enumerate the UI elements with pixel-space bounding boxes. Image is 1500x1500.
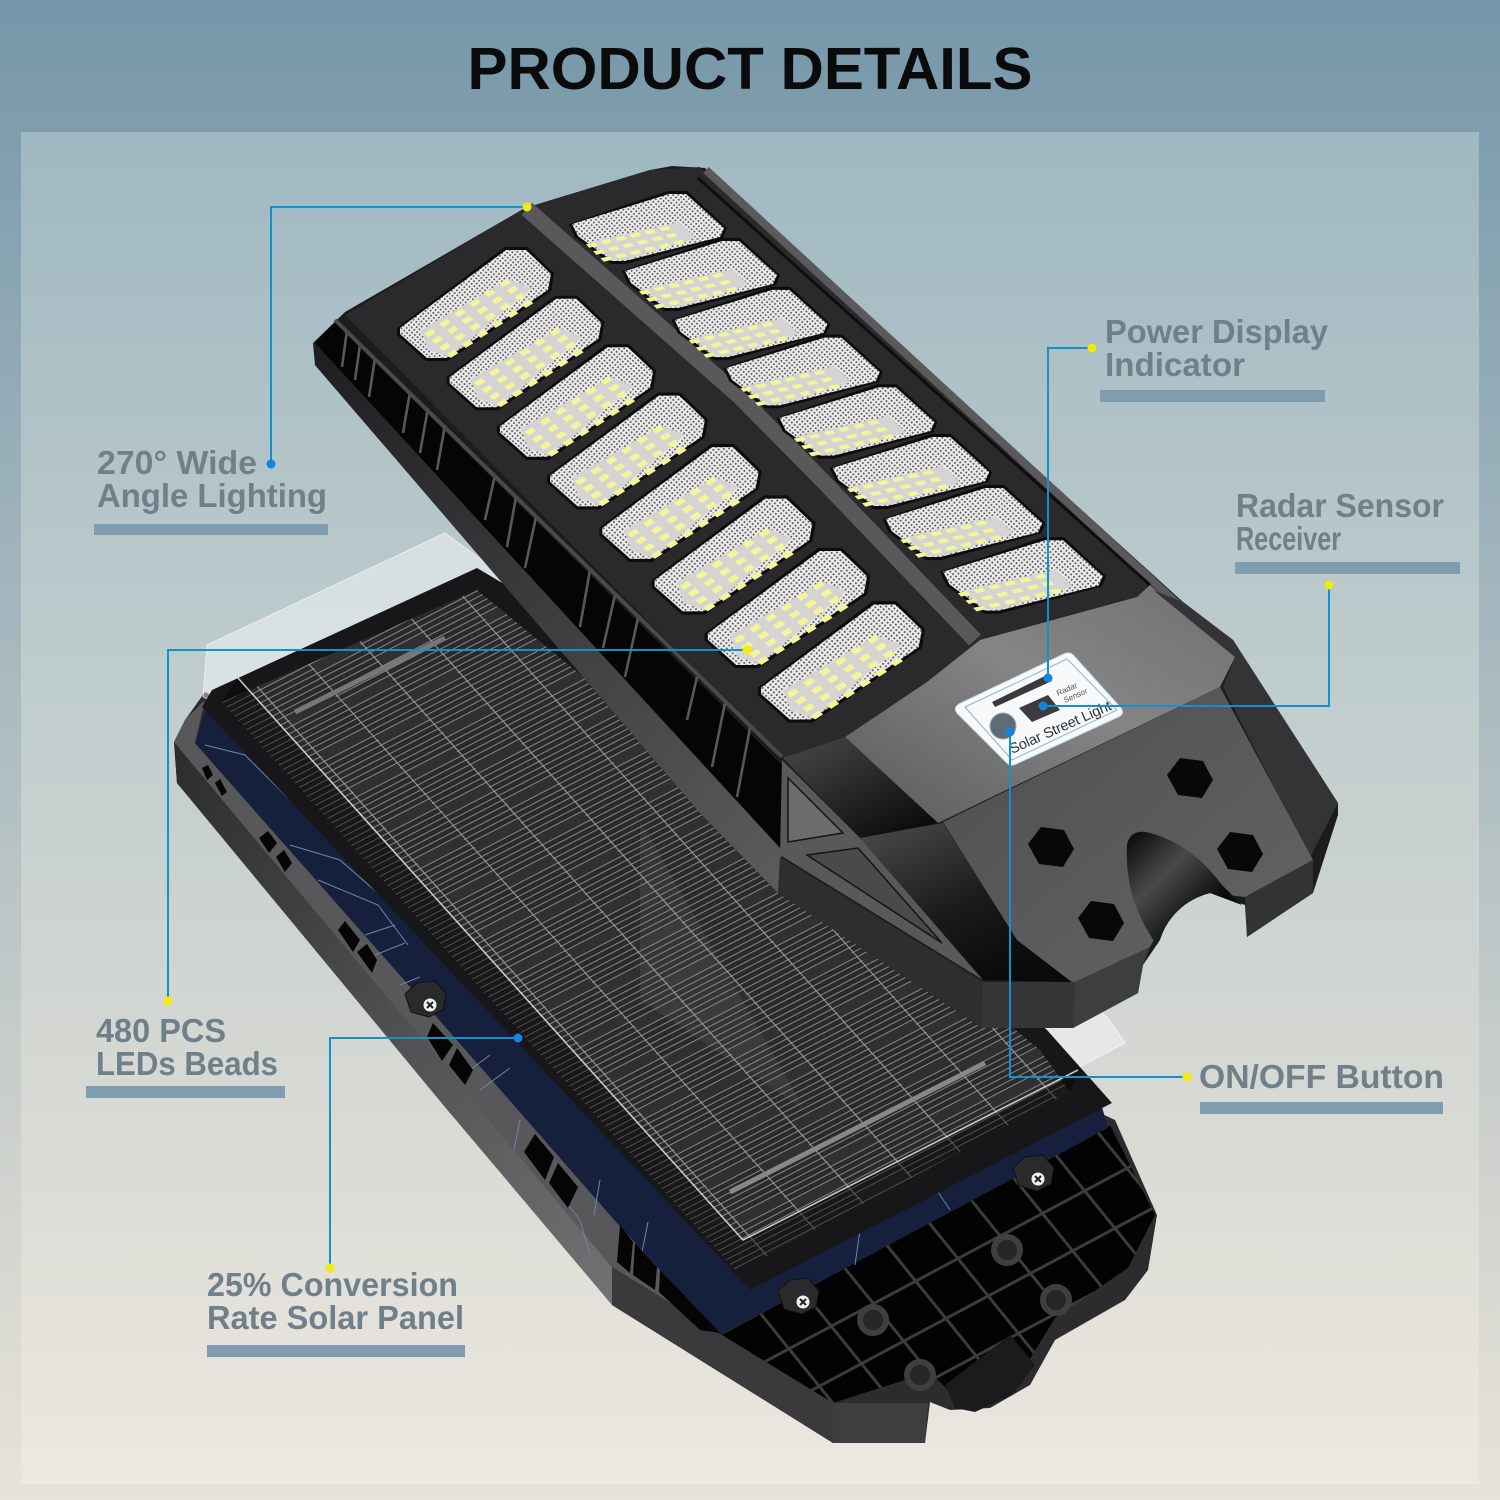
callout: LED beads [86,646,752,1098]
dot start [266,460,276,468]
dot start [1088,344,1096,352]
label: Indicator [1105,346,1245,383]
power button [990,713,1016,739]
label: LEDs Beads [96,1045,278,1082]
label: Radar Sensor [1236,487,1444,524]
label: Rate Solar Panel [207,1299,464,1336]
title: PRODUCT DETAILS [468,36,1032,102]
label [96,1012,278,1082]
dot end [1006,728,1014,736]
lower dark facet [860,823,1073,982]
sticker label: Solar Street Light [1007,698,1114,758]
underline [1235,562,1460,574]
leader line [271,207,527,464]
underline [207,1345,465,1357]
underline [1200,1102,1443,1114]
side wall [174,742,612,1305]
circuit traces [205,745,950,1275]
callout: radar sensor receiver [1038,487,1460,710]
callout: power display indicator [1044,313,1329,682]
label: Angle Lighting [97,477,327,514]
power display bar [992,675,1052,707]
saddle channel [1127,832,1242,945]
upper dark facet [783,737,938,838]
dot end [742,646,752,654]
lower rim facet [612,1267,833,1443]
sticker inner border [965,659,1117,760]
panel busbar top [295,638,445,712]
left LED modules [397,247,925,723]
inner rim line [698,178,1150,585]
solar panel frame [202,568,1112,1290]
lamp head [313,166,1338,1028]
label [1236,487,1444,557]
center divider [527,209,975,640]
solar cells [222,590,1070,1272]
radar window [1019,695,1060,722]
upper rail [335,320,782,757]
lower mount plate [943,687,1313,983]
underline [86,1086,285,1098]
dot start [1182,1072,1192,1082]
dot end [1044,674,1052,682]
dot start [164,996,172,1006]
rim facet right of front [1073,947,1150,1028]
comb strip shading [222,678,1078,1272]
label: 480 PCS [96,1012,226,1049]
label: ON/OFF Button [1199,1058,1444,1095]
lower housing with solar panel [174,533,1157,1443]
panel glass edge [238,678,1078,1240]
vent slats [342,330,750,797]
blue circuit band [195,690,1108,1335]
rim facet by notch [1245,860,1313,937]
leader line [1043,585,1329,706]
mount screws [405,981,1054,1314]
right rim [706,170,1180,606]
panel busbar bottom [730,1063,985,1192]
panel reflection [640,820,805,1110]
sensor label: Sensor [1062,686,1089,705]
leader line [1010,732,1187,1077]
label: Power Display [1105,313,1329,350]
control sticker [955,653,1122,765]
dot start [1324,580,1334,590]
triangle detail lower [807,848,942,943]
label: 270° Wide [97,444,257,481]
hex mounting holes [1028,758,1263,941]
head silhouette [313,166,1338,1028]
dot end [1038,702,1048,710]
triangle detail upper [788,778,843,842]
top ledge [174,700,720,1335]
right LED modules [569,191,1106,614]
label [1105,313,1329,383]
mounting rings [860,1237,1069,1388]
radar label: Radar [1055,681,1079,698]
body rear face [845,585,1235,823]
triangle frame [780,760,983,980]
front facet [833,1403,928,1443]
label [207,1266,464,1336]
leader line [168,650,747,1001]
callout: wide angle lighting [94,202,532,535]
underline [94,524,328,535]
housing body [174,692,1157,1443]
vent opening [315,322,782,850]
label: 25% Conversion [207,1266,458,1303]
callout: solar panel [207,1034,522,1357]
ledge vent openings [202,765,720,1333]
underline [1100,390,1325,402]
front rim facet [982,982,1075,1028]
sticker base [955,653,1122,765]
dot end [522,202,532,212]
bezel top face [345,167,1150,758]
label: Receiver [1236,520,1341,557]
leader line [330,1038,518,1268]
rib cavity [722,1125,1155,1403]
dot start [326,1264,334,1272]
label [97,444,327,514]
leader line [1048,348,1092,678]
callout: on/off button [1006,728,1444,1114]
lower side wall [778,857,983,1028]
pole channel [945,1335,1035,1412]
glass sheet [203,533,1125,1068]
right facet [1153,590,1338,857]
dot end [514,1034,522,1042]
lower wall strip [315,343,782,893]
